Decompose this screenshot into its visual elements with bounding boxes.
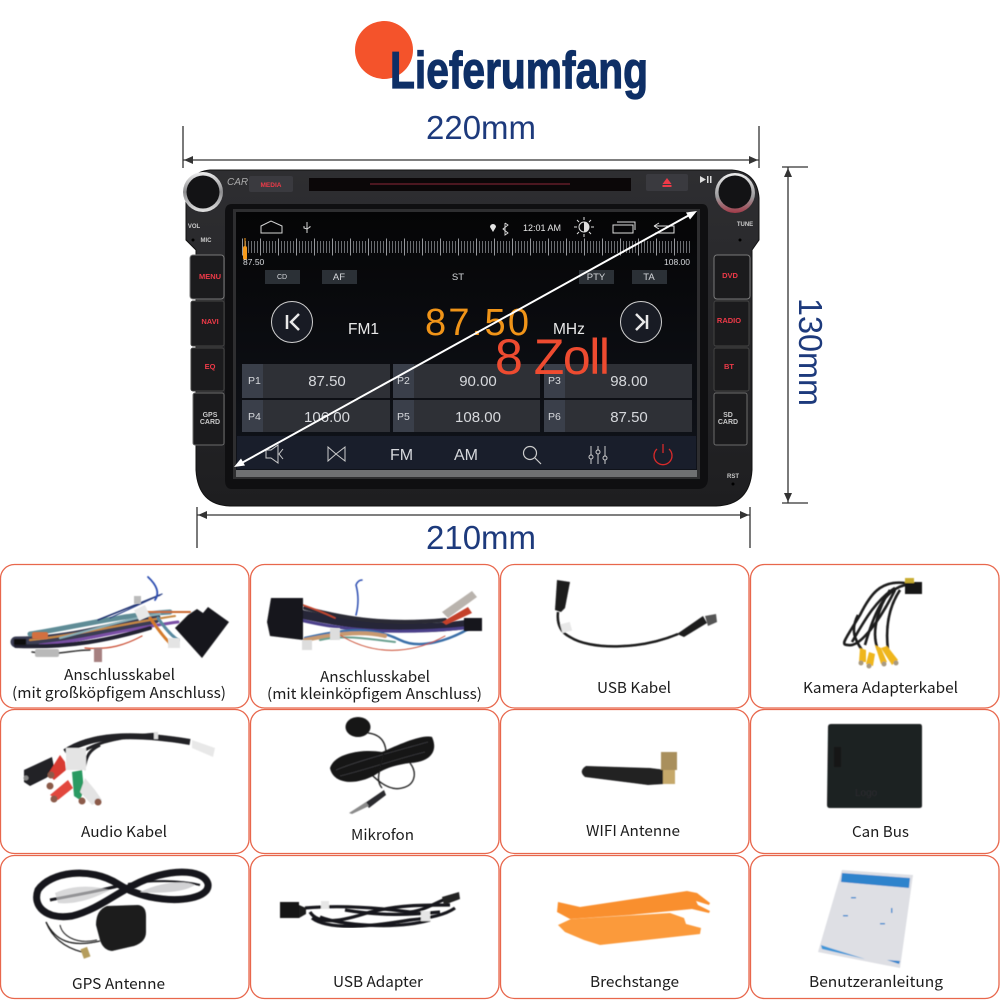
panel: Audio Kabel	[0, 710, 249, 854]
eject button	[646, 174, 688, 191]
status bar icons: 12:01 AM	[523, 223, 561, 233]
status bar icons	[261, 217, 674, 237]
title with orange circle	[355, 21, 648, 100]
right side buttons: SD	[723, 412, 733, 419]
preset buttons: P1	[248, 375, 261, 387]
right knob	[715, 173, 755, 213]
left labels: MIC	[200, 238, 212, 244]
wifi antenna	[582, 752, 677, 785]
caption: Brechstange	[590, 971, 679, 992]
panel: Kamera Adapterkabel	[750, 564, 999, 708]
bottom control bar: FM	[390, 447, 413, 464]
bottom control bar	[237, 436, 696, 469]
preset buttons: 87.50	[610, 409, 648, 426]
left side buttons: MENU	[199, 272, 221, 281]
preset buttons: 90.00	[459, 373, 497, 390]
frequency range labels: 87.50	[243, 257, 265, 267]
media button: MEDIA	[261, 182, 282, 189]
band option tags: ST	[452, 272, 464, 283]
right labels: RST	[727, 474, 739, 480]
touchscreen	[233, 209, 700, 479]
dimension: 130mm height: 130mm	[792, 298, 829, 406]
panel: Mikrofon	[250, 710, 499, 854]
caption: Benutzeranleitung	[809, 971, 944, 992]
band option tags	[265, 270, 667, 284]
tuner scale	[242, 238, 692, 260]
dimension: 220mm width: 220mm	[426, 109, 536, 146]
panel: Benutzeranleitung	[750, 856, 999, 998]
right side buttons: DVD	[722, 271, 738, 280]
band option tags: CD	[277, 274, 287, 281]
dimension: 210mm width	[197, 507, 750, 556]
caption: (mit großköpfigem Anschluss)	[12, 682, 226, 703]
harness plugs	[14, 596, 180, 662]
right side buttons: CARD	[718, 419, 738, 426]
play pause icon	[700, 176, 712, 183]
right side buttons: BT	[724, 362, 734, 371]
caption: Kamera Adapterkabel	[803, 677, 958, 698]
caption: USB Adapter	[333, 971, 423, 992]
caption: Anschlusskabel	[320, 666, 430, 687]
dimension: 130mm height	[782, 167, 829, 503]
usb cable	[555, 580, 717, 646]
caption: Can Bus	[852, 821, 909, 842]
panel: Brechstange	[500, 856, 749, 998]
caption: (mit kleinköpfigem Anschluss)	[267, 683, 482, 704]
media button	[249, 176, 293, 192]
panel: GPS Antenne	[0, 856, 249, 998]
preset buttons	[242, 364, 692, 432]
can bus module	[827, 724, 922, 808]
right labels: TUNE	[737, 222, 753, 228]
next button	[620, 302, 662, 342]
frequency readout: 87.50	[425, 302, 529, 344]
caption: Audio Kabel	[81, 821, 167, 842]
frequency range labels: 108.00	[664, 257, 690, 267]
left side buttons: EQ	[205, 362, 216, 371]
left labels: VOL	[188, 224, 200, 230]
left side buttons	[190, 255, 224, 445]
preset buttons: 108.00	[455, 409, 501, 426]
preset buttons: P5	[397, 411, 410, 423]
preset buttons: 106.00	[304, 409, 350, 426]
RCA plugs	[302, 591, 482, 650]
can bus module: Logo	[855, 788, 878, 799]
right side buttons: RADIO	[717, 316, 741, 325]
caption: GPS Antenne	[72, 973, 165, 994]
diagonal arrow	[234, 211, 697, 467]
left labels	[188, 224, 212, 244]
device body	[186, 170, 759, 506]
caption	[267, 666, 482, 704]
car radio device	[183, 170, 759, 506]
slot glow	[370, 183, 570, 185]
left knob	[183, 172, 223, 212]
gps antenna	[37, 872, 208, 959]
right side buttons	[714, 255, 750, 445]
preset buttons: P2	[397, 375, 410, 387]
preset buttons: P4	[248, 411, 261, 423]
harness wires	[16, 577, 190, 653]
8 Zoll label: 8 Zoll	[495, 329, 610, 385]
dimension: 210mm width: 210mm	[426, 519, 536, 556]
microphone	[330, 717, 434, 814]
user manual	[818, 870, 913, 968]
panel: USB Kabel	[500, 564, 749, 708]
left side buttons: CARD	[200, 419, 220, 426]
preset buttons: P6	[548, 411, 561, 423]
dimension: 220mm width	[183, 109, 759, 168]
caption: Anschlusskabel	[64, 664, 175, 685]
right labels	[727, 222, 753, 486]
previous button	[272, 302, 312, 342]
bottom control bar: AM	[454, 447, 478, 464]
left side buttons: GPS	[203, 412, 218, 419]
pry tools	[557, 891, 710, 945]
band option tags: TA	[643, 272, 655, 283]
MHz label: MHz	[553, 321, 585, 338]
panel: USB Adapter	[250, 856, 499, 998]
panel: Anschlusskabel klein	[250, 564, 499, 708]
panel: WIFI Antenne	[500, 710, 749, 854]
panel: Can Bus	[750, 710, 999, 854]
band option tags: PTY	[587, 272, 606, 283]
harness wires	[300, 580, 470, 650]
caption: Mikrofon	[351, 824, 414, 845]
preset buttons: P3	[548, 375, 561, 387]
usb adapter cable	[280, 892, 460, 926]
title with orange circle: Lieferumfang	[390, 42, 648, 100]
panel: Anschlusskabel groß	[0, 564, 249, 708]
logo mark: CAR	[227, 177, 248, 188]
disc slot	[309, 178, 631, 191]
caption: WIFI Antenne	[586, 820, 680, 841]
camera cable	[844, 578, 922, 668]
caption	[12, 664, 226, 703]
inner bezel	[225, 204, 708, 489]
audio cable	[24, 732, 215, 806]
preset buttons: 87.50	[308, 373, 346, 390]
harness connector	[175, 607, 229, 658]
harness connector	[267, 598, 303, 640]
frequency range labels	[243, 257, 690, 267]
caption: USB Kabel	[597, 677, 671, 698]
left side buttons: NAVI	[201, 317, 219, 326]
FM1 label: FM1	[348, 321, 379, 338]
band option tags: AF	[333, 272, 345, 283]
preset buttons: 98.00	[610, 373, 648, 390]
